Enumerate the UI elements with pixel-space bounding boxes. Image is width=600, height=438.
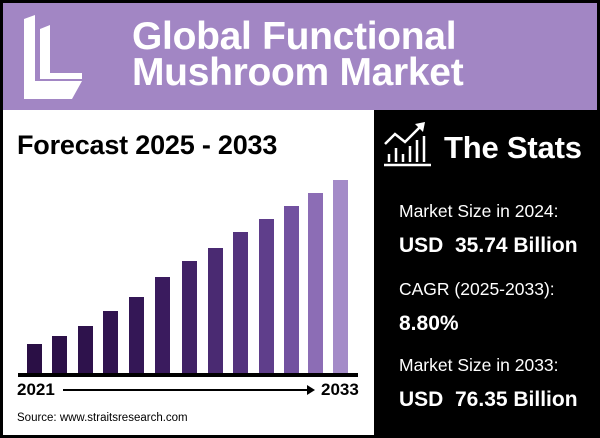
heading: Forecast 2025 - 2033	[17, 130, 277, 160]
title: Global Functional	[132, 15, 456, 58]
logo	[24, 15, 82, 99]
stat: 2033	[399, 355, 578, 411]
source: Source: www.straitsresearch.com	[17, 412, 188, 424]
stat: cagr: 8.80%	[399, 312, 459, 335]
panel: chart	[3, 110, 374, 435]
stat: 2033: USD 76.35 Billion	[399, 388, 578, 411]
title	[132, 15, 464, 94]
stat: 2033: Market Size in 2033:	[399, 355, 559, 375]
bar chart	[18, 180, 358, 377]
panel: the stats	[374, 110, 597, 435]
title: Mushroom Market	[132, 51, 463, 94]
stat: 2024: Market Size in 2024:	[399, 201, 559, 221]
stat: 2024	[399, 201, 578, 257]
stat: cagr: CAGR (2025-2033):	[399, 279, 555, 299]
heading: The Stats	[444, 130, 582, 165]
header panel	[3, 3, 597, 110]
stat: 2024: USD 35.74 Billion	[399, 234, 578, 257]
axis labels and arrow	[17, 380, 359, 399]
stat: cagr	[399, 279, 555, 335]
axis labels and arrow: 2021	[17, 380, 55, 399]
icon: chart	[384, 122, 431, 166]
axis labels and arrow: 2033	[321, 380, 359, 399]
